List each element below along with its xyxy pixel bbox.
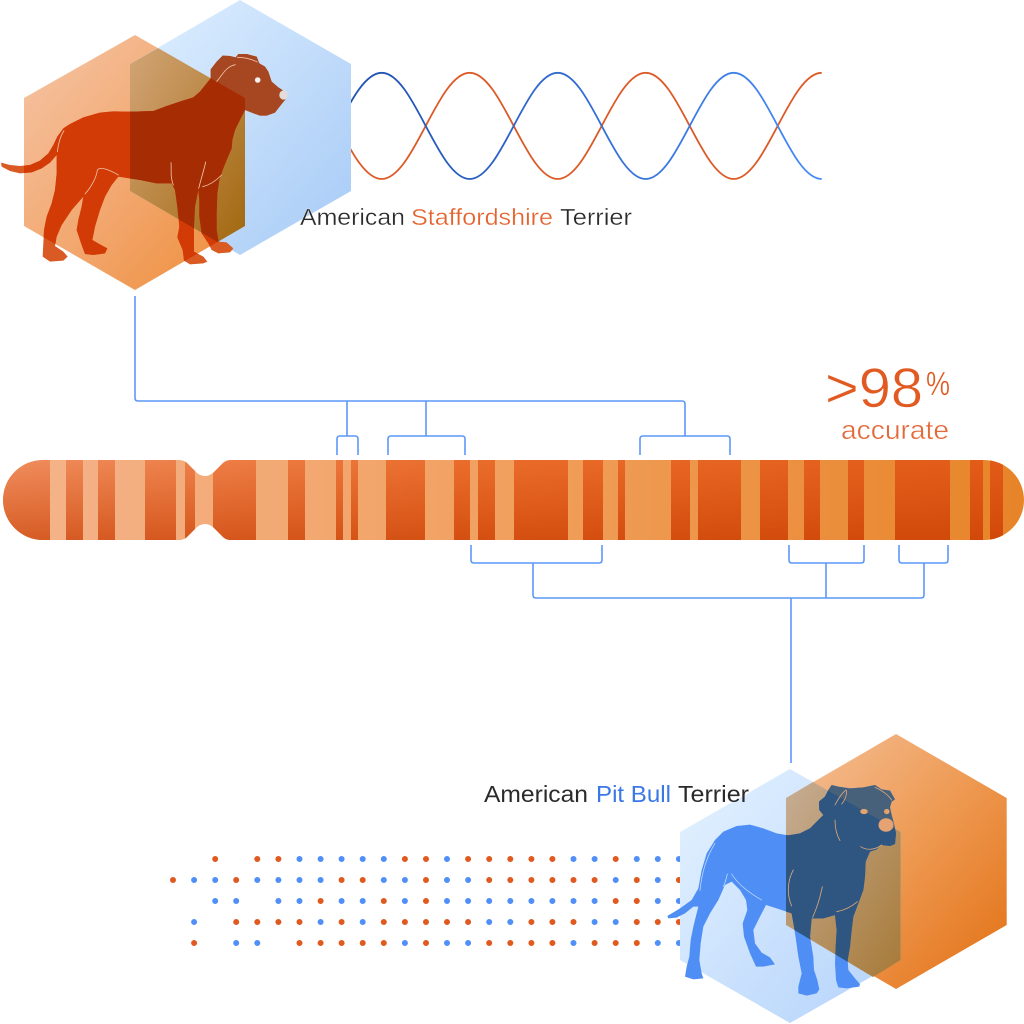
staffordshire terrier hexagon emblem with dog xyxy=(1,0,351,290)
label: american pit bull terrier: American xyxy=(484,781,588,807)
blue hexagon xyxy=(130,0,351,255)
label: american pit bull terrier xyxy=(484,781,749,807)
icon: staffordshire terrier silhouette xyxy=(1,54,288,264)
label: american staffordshire terrier: Terrier xyxy=(560,204,632,230)
hexagon overlap xyxy=(130,48,245,242)
stat: greater than 98 percent accurate: >98 xyxy=(825,356,923,419)
connector: top brackets xyxy=(135,296,730,455)
stat: greater than 98 percent accurate: accurate xyxy=(841,415,949,445)
pit bull terrier hexagon emblem with dog xyxy=(667,734,1007,1023)
hexagon overlap xyxy=(786,782,901,977)
dot sequence: blue markers xyxy=(194,859,679,943)
stat: greater than 98 percent accurate xyxy=(825,356,950,445)
chromosome with bands xyxy=(0,460,1024,540)
icon: pit bull silhouette xyxy=(667,785,896,996)
dot sequence: orange markers xyxy=(173,859,679,943)
label: american staffordshire terrier xyxy=(300,204,632,230)
label: american pit bull terrier: Pit Bull xyxy=(596,781,671,807)
label: american staffordshire terrier: American xyxy=(300,204,405,230)
orange hexagon xyxy=(24,35,245,290)
blue hexagon xyxy=(680,769,901,1023)
genome sequence wave xyxy=(294,73,822,179)
orange hexagon xyxy=(786,734,1007,989)
stat: greater than 98 percent accurate: % xyxy=(926,365,950,402)
label: american staffordshire terrier: Staffordshire xyxy=(411,204,553,230)
connector: bottom brackets xyxy=(471,545,948,763)
label: american pit bull terrier: Terrier xyxy=(678,781,749,807)
